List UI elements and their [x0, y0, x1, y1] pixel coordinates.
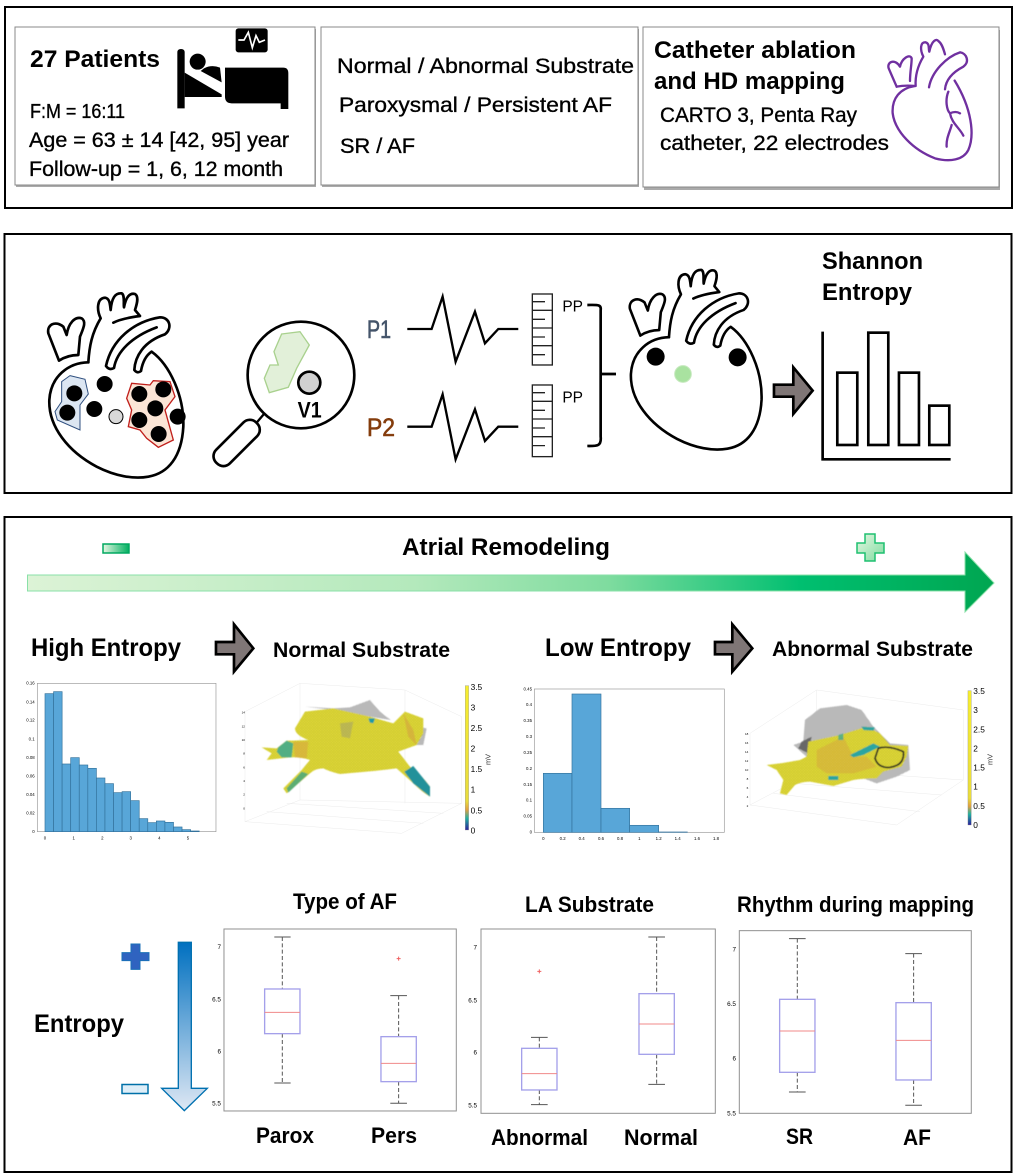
chart: high entropy histogram: 0: [32, 829, 35, 834]
icon: measuring rulers and peak-to-peak bracket: [532, 294, 616, 457]
chart: boxplot LA substrate: 6: [473, 1050, 477, 1057]
chart: boxplot rhythm during mapping: 5.5: [727, 1110, 736, 1117]
chart: boxplot type of AF: 6: [217, 1048, 221, 1055]
chart: low entropy histogram: 0.4: [526, 702, 533, 707]
heading: Atrial Remodeling: Atrial Remodeling: [402, 534, 610, 561]
icon: plus blue: [122, 944, 149, 969]
text: patient characteristics: F:M = 16:11: [30, 101, 125, 123]
label: Pers: Pers: [371, 1123, 417, 1148]
chart: abnormal substrate voltage map: mV: [986, 754, 995, 765]
text: mapping system: CARTO 3, Penta Ray: [660, 104, 857, 127]
chart: boxplot rhythm during mapping: 6: [732, 1056, 736, 1063]
chart: normal substrate voltage map: [242, 682, 493, 836]
arrow: atrial remodeling gradient: [28, 552, 994, 612]
chart: electrogram traces: [407, 297, 518, 459]
chart: normal substrate voltage map: 1: [471, 785, 476, 795]
chart: high entropy histogram: [26, 681, 216, 840]
chart: normal substrate voltage map: 3.5: [471, 682, 483, 692]
label: Parox: Parox: [256, 1123, 315, 1148]
chart: normal substrate voltage map: 12: [242, 724, 245, 728]
chart: boxplot LA substrate: [468, 929, 715, 1113]
heading: catheter ablation and HD mapping: and HD mapping: [654, 68, 845, 95]
chart: boxplot type of AF: 7: [217, 944, 221, 951]
chart: low entropy histogram: 0: [530, 830, 533, 835]
label: PP lower: PP: [562, 390, 583, 407]
chart: high entropy histogram: 0.06: [26, 773, 35, 778]
chart: abnormal substrate voltage map: 0.5: [973, 801, 985, 811]
chart: low entropy histogram: 1.8: [713, 836, 720, 841]
chart: abnormal substrate voltage map: 0: [973, 820, 978, 830]
chart: normal substrate voltage map: 2: [243, 793, 245, 797]
chart: high entropy histogram: 0.08: [26, 755, 35, 760]
panel: entropy computation workflow: [4, 234, 1012, 493]
chart: boxplot rhythm during mapping: 6.5: [727, 1001, 736, 1008]
heading: Type of AF: Type of AF: [293, 889, 397, 914]
chart: low entropy histogram: [524, 686, 724, 841]
text: patient characteristics: [29, 101, 289, 181]
chart: abnormal substrate voltage map: 1.5: [973, 763, 985, 773]
chart: low entropy histogram: 0.25: [524, 750, 533, 755]
chart: abnormal substrate voltage map: 12: [745, 759, 749, 763]
text: patient characteristics: Follow-up = 1, 6, 12 month: [29, 158, 283, 181]
heading: 27 patients: 27 Patients: [30, 46, 160, 73]
chart: low entropy histogram: 0: [542, 836, 545, 841]
panel: study population and procedure: [5, 7, 1012, 208]
chart: abnormal substrate voltage map: 16: [745, 741, 749, 745]
icon: patient in bed with monitor: [177, 28, 288, 109]
chart: abnormal substrate voltage map: [745, 686, 995, 830]
chart: high entropy histogram: 0.1: [29, 736, 35, 741]
chart: abnormal substrate voltage map: 2.5: [973, 724, 985, 734]
chart: low entropy histogram: 0.2: [560, 836, 566, 841]
text: group comparisons: [337, 55, 634, 158]
chart: low entropy histogram: 0.4: [579, 836, 585, 841]
chart: high entropy histogram: 4: [158, 835, 161, 840]
chart: abnormal substrate voltage map: 2: [973, 743, 978, 753]
chart: low entropy histogram: 0.8: [617, 836, 624, 841]
card: patients: [15, 27, 316, 187]
label: V1: V1: [298, 398, 322, 423]
heading: Low Entropy: Low Entropy: [545, 634, 691, 662]
chart: normal substrate voltage map: 6: [243, 765, 245, 769]
chart: low entropy histogram: 1.2: [656, 836, 662, 841]
chart: normal substrate voltage map: 2.5: [471, 723, 483, 733]
text: mapping system: catheter, 22 electrodes: [660, 132, 889, 155]
heading: Entropy: Entropy: [34, 1010, 124, 1038]
chart: high entropy histogram: 1: [72, 835, 75, 840]
label: P2: P2: [367, 414, 395, 442]
label: PP upper: PP: [562, 299, 583, 316]
chart: abnormal substrate voltage map: 4: [747, 795, 749, 799]
chart: high entropy histogram: 2: [101, 835, 104, 840]
heading: catheter ablation and HD mapping: Catheter ablation: [654, 37, 856, 64]
arrow: high entropy to normal substrate: [216, 624, 253, 672]
chart: low entropy histogram: 1: [638, 836, 641, 841]
icon: purple heart: [888, 40, 972, 160]
label: Abnormal: Abnormal: [491, 1125, 588, 1150]
chart: abnormal substrate voltage map: 1: [973, 782, 978, 792]
chart: boxplot type of AF: 6.5: [212, 996, 221, 1003]
heading: catheter ablation and HD mapping: [654, 37, 856, 95]
chart: low entropy histogram: 0.45: [524, 686, 533, 691]
chart: boxplot LA substrate: 6.5: [468, 997, 477, 1004]
chart: high entropy histogram: 0: [44, 835, 47, 840]
chart: low entropy histogram: 0.3: [526, 734, 533, 739]
chart: low entropy histogram: 1.6: [694, 836, 701, 841]
label: AF: AF: [903, 1125, 931, 1150]
chart: abnormal substrate voltage map: 14: [745, 750, 749, 754]
chart: abnormal substrate voltage map: 3: [973, 705, 978, 715]
chart: high entropy histogram: 0.14: [26, 699, 35, 704]
heading: Shannon Entropy: [822, 248, 923, 306]
icon: heart with electrode points: [48, 293, 186, 478]
chart: low entropy histogram: 0.05: [524, 814, 533, 819]
arrow: entropy gradient: [162, 942, 207, 1111]
heading: High Entropy: High Entropy: [31, 634, 181, 662]
chart: abnormal substrate voltage map: 18: [745, 732, 749, 736]
heading: Rhythm during mapping: Rhythm during mapping: [737, 892, 974, 917]
icon: magnifying glass on V1: [210, 322, 354, 470]
chart: abnormal substrate voltage map: 10: [745, 768, 749, 772]
label: P1: P1: [367, 316, 391, 344]
chart: boxplot type of AF: 5.5: [212, 1101, 221, 1108]
chart: high entropy histogram: 0.02: [26, 810, 35, 815]
heading: LA Substrate: LA Substrate: [525, 892, 654, 917]
label: Normal: Normal: [624, 1125, 698, 1150]
text: group comparisons: SR / AF: [340, 135, 415, 158]
chart: low entropy histogram: 0.35: [524, 718, 533, 723]
chart: abnormal substrate voltage map: 6: [747, 786, 749, 790]
chart: high entropy histogram: 0.12: [26, 718, 35, 723]
chart: normal substrate voltage map: 4: [243, 779, 245, 783]
text: patient characteristics: Age = 63 ± 14 [42, 95] year: [29, 129, 289, 152]
chart: normal substrate voltage map: 0: [243, 806, 245, 810]
heading: Shannon Entropy: Entropy: [822, 279, 913, 306]
chart: boxplot rhythm during mapping: [727, 931, 971, 1117]
chart: boxplot LA substrate: 5.5: [468, 1102, 477, 1109]
chart: entropy histogram icon: [823, 332, 951, 459]
icon: plus green: [857, 534, 884, 561]
chart: high entropy histogram: 5: [187, 835, 190, 840]
chart: normal substrate voltage map: 14: [242, 711, 245, 715]
icon: minus green: [103, 544, 129, 553]
chart: normal substrate voltage map: 10: [242, 738, 245, 742]
chart: abnormal substrate voltage map: 3.5: [973, 686, 985, 696]
text: mapping system: [660, 104, 889, 155]
chart: high entropy histogram: 3: [129, 835, 132, 840]
chart: abnormal substrate voltage map: 2: [747, 804, 749, 808]
chart: boxplot type of AF: [212, 929, 456, 1111]
chart: high entropy histogram: 0.16: [26, 681, 35, 686]
chart: low entropy histogram: 0.15: [524, 782, 533, 787]
icon: heart with single point: [630, 270, 762, 450]
chart: normal substrate voltage map: mV: [484, 754, 493, 765]
chart: normal substrate voltage map: 1.5: [471, 764, 483, 774]
text: group comparisons: Paroxysmal / Persistent AF: [339, 94, 612, 117]
card: catheter ablation: [643, 27, 1000, 190]
heading: Abnormal Substrate: Abnormal Substrate: [772, 638, 973, 661]
panel: atrial remodeling results: [4, 517, 1012, 1172]
chart: normal substrate voltage map: 0.5: [471, 805, 483, 815]
chart: boxplot rhythm during mapping: 7: [732, 946, 736, 953]
chart: boxplot LA substrate: 7: [473, 944, 477, 951]
chart: abnormal substrate voltage map: 8: [747, 777, 749, 781]
label: SR: SR: [786, 1124, 813, 1149]
arrow: low entropy to abnormal substrate: [715, 624, 752, 672]
arrow: to histogram: [774, 367, 813, 414]
chart: high entropy histogram: 0.04: [26, 792, 35, 797]
chart: normal substrate voltage map: 3: [471, 702, 476, 712]
chart: low entropy histogram: 0.6: [598, 836, 605, 841]
chart: normal substrate voltage map: 8: [243, 752, 245, 756]
chart: low entropy histogram: 1.4: [675, 836, 681, 841]
chart: normal substrate voltage map: 0: [471, 826, 476, 836]
text: group comparisons: Normal / Abnormal Substrate: [337, 55, 634, 78]
card: patient groups: [321, 27, 639, 187]
chart: low entropy histogram: 0.2: [526, 766, 533, 771]
chart: low entropy histogram: 0.1: [526, 798, 533, 803]
chart: normal substrate voltage map: 2: [471, 744, 476, 754]
heading: Normal Substrate: Normal Substrate: [273, 639, 450, 662]
icon: minus blue: [122, 1084, 148, 1094]
heading: Shannon Entropy: Shannon: [822, 248, 923, 275]
